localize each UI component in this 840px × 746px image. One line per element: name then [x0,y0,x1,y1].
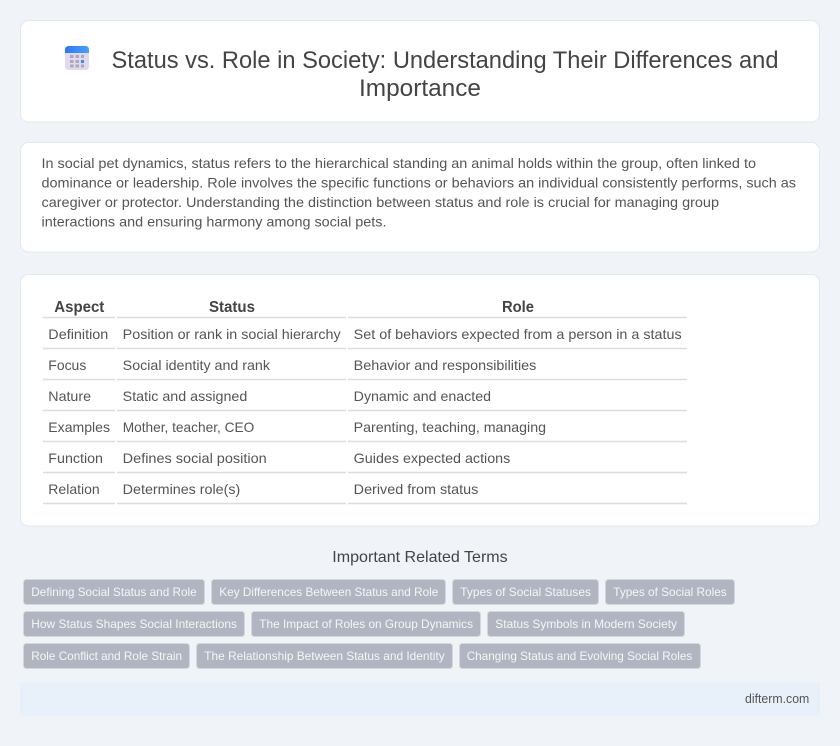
panel: header [20,20,820,122]
tag: status and identity: The Relationship Between Status and Identity [204,649,445,663]
table row: definition [43,326,687,348]
table row: nature: Dynamic and enacted [354,388,491,404]
tag: role conflict and role strain: Role Conflict and Role Strain [31,649,182,663]
table row: function: Defines social position [123,450,267,466]
table row: relation [43,481,687,504]
tag: status symbols: Status Symbols in Modern Society [495,617,677,631]
tag: status and identity [196,644,452,668]
tag: role conflict and role strain [24,644,190,668]
table row: examples: Mother, teacher, CEO [123,419,254,435]
text block: explanation: caregiver or protector. Understanding the distinction between status and role is crucial for managing group [42,194,719,210]
table row: function [43,450,687,472]
tag: key differences [212,580,446,604]
table row: relation: Relation [48,481,100,497]
tag: how status shapes social interactions: How Status Shapes Social Interactions [31,617,237,631]
tag: status symbols [488,612,684,636]
text block: explanation: dominance or leadership. Role involves the specific functions or behaviors an individual consistently performs, such as [42,174,796,190]
table row: nature: Static and assigned [123,388,247,404]
table row: focus: Behavior and responsibilities [354,357,536,373]
table row: examples: Examples [48,419,110,435]
table row: focus [43,357,687,380]
table row: definition: Set of behaviors expected from a person in a status [354,326,682,342]
icon: calendar [65,46,89,70]
table row: function: Guides expected actions [354,450,510,466]
title [112,47,778,102]
table row: nature [43,388,687,410]
footer bar: difterm.com [745,691,809,706]
tag: impact of roles [252,612,480,636]
table header row: Status [209,299,255,316]
tag: impact of roles: The Impact of Roles on Group Dynamics [259,617,473,631]
table header row [43,299,687,318]
table row: relation: Determines role(s) [123,481,240,497]
table row: definition: Position or rank in social hierarchy [123,326,341,342]
text block: explanation [42,155,796,230]
table header row: Aspect [54,299,105,316]
tag: defining social status and role [24,580,204,604]
tag: types of social roles [606,580,734,604]
tag: types of social statuses: Types of Social Statuses [460,585,591,599]
tag: defining social status and role: Defining Social Status and Role [31,585,197,599]
table row: nature: Nature [48,388,91,404]
table row: focus: Focus [48,357,86,373]
tag: types of social statuses [452,580,598,604]
related terms tags [24,580,734,668]
tag: how status shapes social interactions [24,612,244,636]
text block: explanation: interactions and ensuring harmony among social pets. [42,214,387,230]
table row: definition: Definition [48,326,108,342]
panel: introduction text [20,142,820,252]
table header row: Role [502,299,534,316]
tag: changing status [460,644,700,668]
footer bar [20,682,820,716]
table row: examples: Parenting, teaching, managing [354,419,546,435]
tag: key differences: Key Differences Between Status and Role [219,585,439,599]
tag: changing status: Changing Status and Evolving Social Roles [467,649,692,663]
tag: types of social roles: Types of Social Roles [613,585,727,599]
title: Status vs. Role in Society: Understanding Their Differences and [112,47,778,74]
panel: comparison table [20,274,820,526]
table row: examples [43,419,687,442]
table row: relation: Derived from status [354,481,478,497]
table row: focus: Social identity and rank [123,357,271,373]
title: Importance [359,75,481,102]
table row: function: Function [48,450,103,466]
heading: important related terms: Important Related Terms [332,549,508,566]
text block: explanation: In social pet dynamics, status refers to the hierarchical standing an animal holds within the group, often linked to [42,155,756,171]
